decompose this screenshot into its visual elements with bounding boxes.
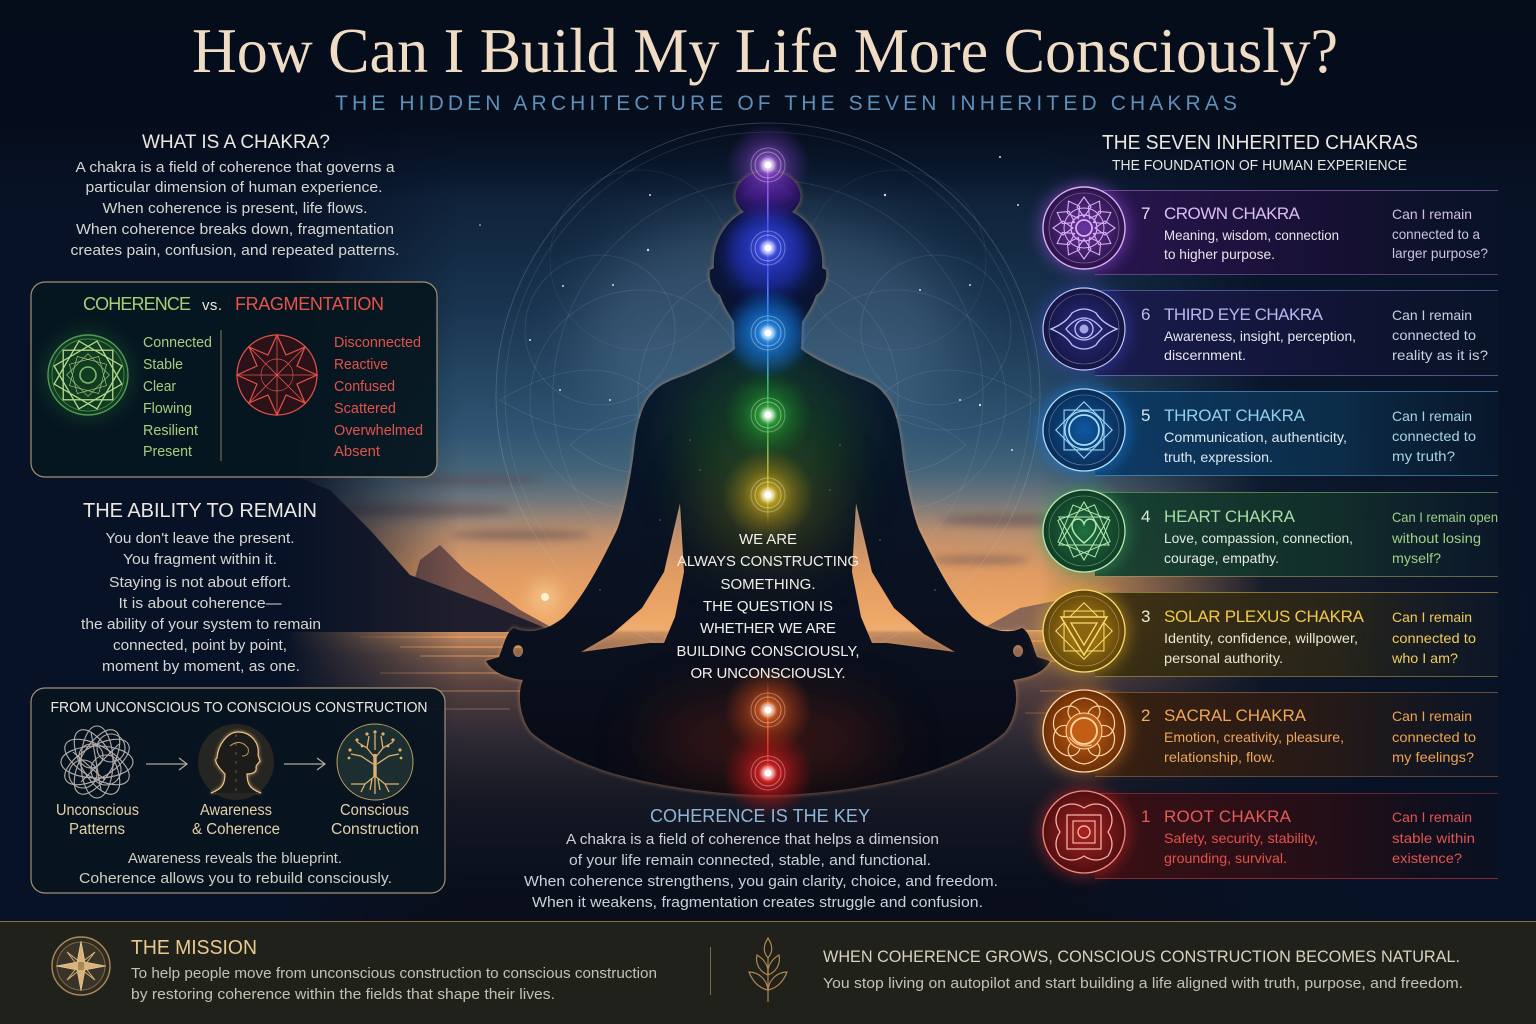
step labels: Construction (331, 821, 419, 838)
row: heart chakra (1040, 487, 1498, 577)
text: my feelings? (1392, 749, 1474, 765)
panel: coherence vs fragmentation (31, 282, 437, 477)
icon: third eye (1040, 285, 1128, 373)
body copy: When it weakens, fragmentation creates struggle and confusion. (532, 894, 983, 911)
text: Love, compassion, connection, (1164, 530, 1353, 546)
row: solar plexus chakra (1040, 587, 1498, 677)
text: 1 (1141, 807, 1150, 826)
icon: plant sprig (749, 938, 787, 1002)
text: courage, empathy. (1164, 550, 1279, 566)
row: third eye chakra (1040, 285, 1498, 376)
mountains left (280, 470, 1100, 632)
text (1141, 807, 1475, 866)
panel heading: FROM UNCONSCIOUS TO CONSCIOUS CONSTRUCTION (50, 699, 428, 716)
center statement: BUILDING CONSCIOUSLY, (676, 643, 860, 660)
icon: solar plexus (1040, 587, 1128, 675)
text: THROAT CHAKRA (1164, 406, 1306, 425)
closing statement: You stop living on autopilot and start building a life aligned with truth, purpose, and freedom. (823, 975, 1463, 992)
text: reality as it is? (1392, 347, 1488, 363)
body copy: You fragment within it. (123, 551, 277, 568)
body copy: connected, point by point, (113, 637, 287, 654)
text: Can I remain (1392, 609, 1472, 625)
chakra point 4 (724, 371, 812, 459)
text: Identity, confidence, willpower, (1164, 630, 1358, 646)
text: 4 (1141, 507, 1150, 526)
step labels: Conscious (340, 802, 409, 819)
panel heading (83, 294, 384, 314)
body copy: A chakra is a field of coherence that helps a dimension (566, 831, 939, 848)
text: existence? (1392, 850, 1462, 866)
text: ROOT CHAKRA (1164, 807, 1292, 826)
icon: heart (1040, 487, 1128, 575)
body copy: It is about coherence— (118, 595, 282, 612)
body copy (524, 831, 998, 911)
list: coherent qualities: Stable (143, 356, 183, 373)
text: 2 (1141, 706, 1150, 725)
stars (479, 156, 1019, 451)
text: THIRD EYE CHAKRA (1164, 305, 1324, 324)
body copy: moment by moment, as one. (102, 658, 300, 675)
chakra point 5 (724, 289, 812, 377)
text: connected to (1392, 729, 1476, 745)
chakra point 2 (724, 666, 812, 754)
subtitle: THE HIDDEN ARCHITECTURE OF THE SEVEN INHERITED CHAKRAS (335, 92, 1237, 115)
list: coherent qualities: Resilient (143, 422, 199, 439)
chakra glow inside the body (599, 175, 936, 780)
text: CROWN CHAKRA (1164, 204, 1301, 223)
text: HEART CHAKRA (1164, 507, 1296, 526)
text: connected to (1392, 428, 1476, 444)
list: fragmented qualities: Absent (334, 443, 381, 460)
text: my truth? (1392, 448, 1455, 464)
text: 3 (1141, 607, 1150, 626)
center statement: SOMETHING. (720, 576, 816, 593)
step labels: Awareness (200, 802, 272, 819)
definition: When coherence is present, life flows. (102, 200, 368, 217)
text: connected to a (1392, 226, 1480, 242)
chakra point 3 (722, 449, 814, 541)
definition (70, 159, 400, 259)
text: SOLAR PLEXUS CHAKRA (1164, 607, 1365, 626)
icon: tree of life (337, 724, 413, 800)
text: Can I remain open (1392, 509, 1498, 525)
text: Can I remain (1392, 708, 1472, 724)
text: discernment. (1164, 347, 1246, 363)
text: Emotion, creativity, pleasure, (1164, 729, 1344, 745)
text (1141, 607, 1476, 666)
text: Awareness, insight, perception, (1164, 328, 1356, 344)
text: Meaning, wisdom, connection (1164, 227, 1339, 243)
icon: crown (1040, 184, 1128, 272)
list: coherent qualities: Present (143, 443, 193, 460)
closing statement (823, 948, 1463, 992)
list: fragmented qualities (334, 334, 423, 460)
definition: A chakra is a field of coherence that governs a (76, 159, 395, 176)
text: Safety, security, stability, (1164, 830, 1318, 846)
mission text (131, 937, 657, 1003)
heading: COHERENCE IS THE KEY (650, 806, 870, 826)
sun (529, 581, 561, 613)
icon: throat (1040, 386, 1128, 474)
icon: root (1040, 788, 1128, 876)
closing statement: WHEN COHERENCE GROWS, CONSCIOUS CONSTRUCTION BECOMES NATURAL. (823, 948, 1460, 966)
body copy: Staying is not about effort. (109, 574, 291, 591)
icon: awareness head (198, 724, 274, 800)
right column heading: THE FOUNDATION OF HUMAN EXPERIENCE (1112, 158, 1407, 174)
definition: When coherence breaks down, fragmentation (76, 221, 394, 238)
sacred geometry halo (496, 123, 1040, 667)
text: myself? (1392, 550, 1441, 566)
text: SACRAL CHAKRA (1164, 706, 1307, 725)
text: truth, expression. (1164, 449, 1273, 465)
panel heading: COHERENCE (83, 294, 191, 314)
text (1141, 204, 1488, 262)
text block: what is a chakra (70, 132, 400, 259)
body copy: When coherence strengthens, you gain clarity, choice, and freedom. (524, 873, 998, 890)
text: Can I remain (1392, 408, 1472, 424)
list: fragmented qualities: Overwhelmed (334, 422, 423, 439)
heading: WHAT IS A CHAKRA? (142, 132, 330, 153)
text block: the ability to remain (81, 500, 321, 675)
text (1141, 706, 1476, 765)
body copy (81, 530, 321, 675)
text: relationship, flow. (1164, 749, 1275, 765)
list: fragmented qualities: Disconnected (334, 334, 421, 351)
list: coherent qualities: Clear (143, 378, 176, 395)
body copy: You don't leave the present. (106, 530, 294, 547)
icon: tangled patterns (58, 723, 136, 801)
list: fragmented qualities: Reactive (334, 356, 388, 373)
text: stable within (1392, 830, 1475, 846)
heading: THE ABILITY TO REMAIN (83, 500, 317, 522)
text (1141, 507, 1498, 566)
text: 6 (1141, 305, 1150, 324)
text (1141, 305, 1488, 363)
chakra column on the body (722, 123, 814, 819)
icon: compass (52, 937, 110, 995)
row: sacral chakra (1040, 687, 1498, 777)
water reflections (360, 636, 1110, 714)
chakra point 1 (722, 727, 814, 819)
text: 7 (1141, 204, 1150, 223)
text: without losing (1391, 530, 1481, 546)
text: personal authority. (1164, 650, 1283, 666)
panel caption: Coherence allows you to rebuild consciously. (79, 870, 392, 887)
center statement: WHETHER WE ARE (700, 620, 836, 637)
step labels: Patterns (69, 821, 125, 838)
panel heading: vs. (202, 297, 222, 314)
center statement: ALWAYS CONSTRUCTING (677, 553, 859, 570)
text: 5 (1141, 406, 1150, 425)
text: connected to (1392, 630, 1476, 646)
icon: sacral (1040, 687, 1128, 775)
text: who I am? (1391, 650, 1458, 666)
center statement: WE ARE (739, 531, 797, 548)
list: coherent qualities: Flowing (143, 400, 192, 417)
definition: creates pain, confusion, and repeated patterns. (70, 242, 400, 259)
text block: coherence is the key (524, 806, 998, 911)
body copy: the ability of your system to remain (81, 616, 321, 633)
list: coherent qualities (143, 334, 212, 460)
icon: fragmented red mandala (237, 335, 317, 415)
text: Can I remain (1392, 307, 1472, 323)
text: connected to (1392, 327, 1476, 343)
text: larger purpose? (1392, 245, 1488, 261)
body copy: of your life remain connected, stable, and functional. (569, 852, 931, 869)
panel caption (79, 850, 392, 887)
list: coherent qualities: Connected (143, 334, 212, 351)
panel: from unconscious to conscious construction (31, 688, 445, 893)
definition: particular dimension of human experience. (86, 179, 382, 196)
list: fragmented qualities: Scattered (334, 400, 396, 417)
row: crown chakra (1040, 184, 1498, 275)
meditating figure silhouette (486, 171, 1050, 795)
text: Communication, authenticity, (1164, 429, 1347, 445)
text: Can I remain (1392, 809, 1472, 825)
step labels: & Coherence (192, 821, 280, 838)
title: How Can I Build My Life More Consciously? (192, 16, 1338, 86)
text: grounding, survival. (1164, 850, 1287, 866)
icon: coherent green mandala (42, 329, 134, 421)
right column heading: THE SEVEN INHERITED CHAKRAS (1102, 132, 1418, 154)
footer band (0, 921, 1536, 1024)
chakra point 7 (726, 123, 810, 207)
text: to higher purpose. (1164, 246, 1275, 262)
clouds (330, 475, 1080, 564)
arrow (146, 758, 187, 770)
center statement: OR UNCONSCIOUSLY. (690, 665, 846, 682)
silhouette rim glow (486, 171, 1050, 795)
chakra point 6 (724, 204, 812, 292)
row: throat chakra (1040, 386, 1498, 476)
arrow (284, 758, 325, 770)
step labels: Unconscious (56, 802, 139, 819)
center statement: THE QUESTION IS (703, 598, 833, 615)
text: Can I remain (1392, 206, 1472, 222)
central energy channel (767, 165, 769, 775)
step labels (56, 802, 419, 838)
panel caption: Awareness reveals the blueprint. (128, 850, 342, 867)
text (1141, 406, 1476, 465)
mission text: THE MISSION (131, 937, 257, 959)
panel heading: FRAGMENTATION (235, 294, 384, 314)
list: fragmented qualities: Confused (334, 378, 395, 395)
mission text: by restoring coherence within the fields that shape their lives. (131, 986, 555, 1003)
mission text: To help people move from unconscious construction to conscious construction (131, 965, 657, 982)
right column heading (1102, 132, 1418, 174)
row: root chakra (1040, 788, 1498, 879)
center statement (676, 531, 860, 682)
